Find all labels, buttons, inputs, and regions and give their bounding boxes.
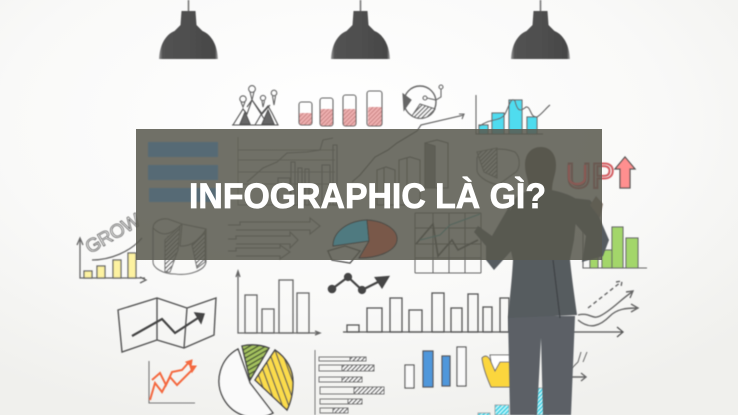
text: UP sketch: UP bbox=[566, 157, 615, 196]
chart: panel line and bars bbox=[238, 137, 337, 205]
chart: hatched cylinder pie bbox=[477, 148, 519, 185]
chart: blue and white bars bbox=[405, 347, 466, 388]
chart: large pie with green and yellow slices bbox=[219, 345, 293, 415]
arrows: wavy arrows to the right bbox=[570, 281, 638, 381]
chart: blue bar chart with curve bbox=[476, 95, 550, 134]
chart: hatched pie with pointer bbox=[403, 85, 443, 118]
chart: orange line chart bbox=[149, 360, 196, 403]
panel: colour tints bbox=[148, 142, 585, 258]
icon: folded map with arrow bbox=[118, 298, 216, 352]
man: jacket seam bbox=[553, 260, 560, 318]
chart: long bar row bbox=[343, 293, 623, 337]
chart: rising line with 3D bars bbox=[352, 114, 464, 205]
icon: mountains with map pins bbox=[232, 86, 278, 125]
sketched charts on the wall bbox=[77, 85, 647, 415]
man: hand raised bbox=[590, 196, 603, 218]
chart: horizontal bars bbox=[315, 350, 384, 415]
lamp left bbox=[159, 0, 218, 59]
man in suit, from behind bbox=[474, 147, 609, 415]
text: GROW sketch: GROW bbox=[82, 210, 145, 258]
title text: INFOGRAPHIC LÀ GÌ? bbox=[189, 176, 546, 216]
chart: beakers with pink liquid bbox=[299, 91, 382, 126]
chart: outlined bar chart bbox=[236, 271, 320, 335]
man: right arm bbox=[572, 198, 609, 262]
hanging lamps bbox=[159, 0, 570, 59]
man: left arm bbox=[474, 205, 512, 270]
icon: yellow folder bbox=[482, 355, 512, 387]
chart: green bars bbox=[583, 215, 647, 268]
chart: exploded pie slice bbox=[328, 246, 360, 263]
lamp centre bbox=[331, 0, 390, 59]
icon: pink up arrow bbox=[615, 157, 635, 188]
chart: black node line bbox=[329, 274, 388, 293]
arrows: three horizontal arrows bbox=[228, 218, 320, 259]
chart: GROWTH with yellow bars bbox=[77, 210, 146, 283]
man: legs bbox=[508, 316, 575, 415]
lamp right bbox=[511, 0, 570, 59]
man: jacket bbox=[505, 188, 578, 318]
title panel bbox=[136, 129, 602, 260]
chart: teal hatched bars bbox=[478, 388, 549, 415]
chart: grid with zig-zag lines bbox=[415, 213, 481, 273]
chart: 3D cylinder pie bbox=[153, 219, 206, 274]
man: head bbox=[525, 147, 556, 190]
